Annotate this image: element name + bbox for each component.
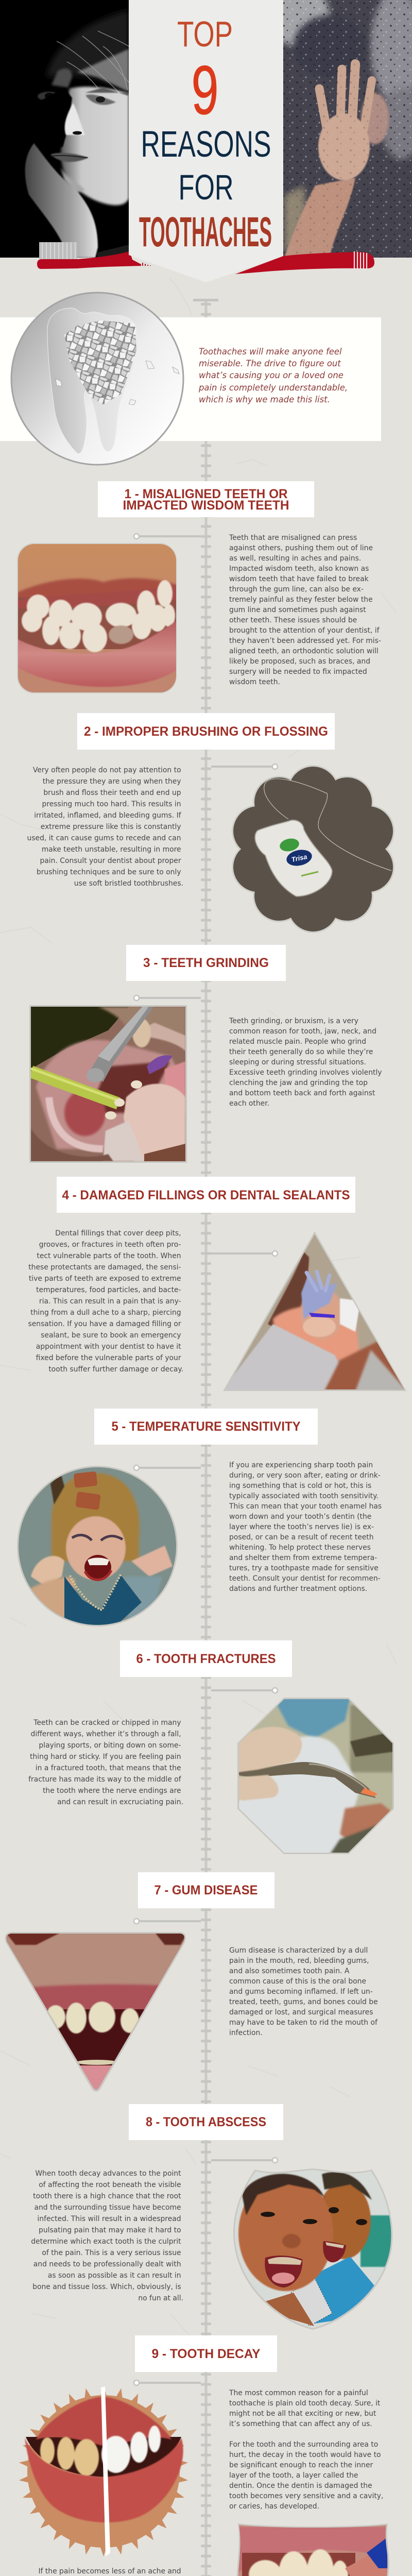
text 9 upper: might not be all that exciting or new, but: [229, 2410, 376, 2418]
text 1: through the gum line, can also be ex-: [229, 585, 364, 594]
text 5: dations and further treatment options.: [229, 1585, 367, 1593]
heading 5: 5 - TEMPERATURE SENSITIVITY: [111, 1419, 301, 1434]
text 9 upper: For the tooth and the surrounding area to: [229, 2441, 378, 2449]
intro panel: [0, 317, 381, 441]
connector 2: [211, 764, 278, 769]
text 2: brushing techniques and be sure to only: [37, 868, 181, 876]
intro paragraph: miserable. The drive to figure out: [199, 359, 341, 368]
text 1: wisdom teeth that have failed to break: [229, 575, 369, 583]
text 9 lower: If the pain becomes less of an ache and: [38, 2567, 181, 2575]
heading 3: [126, 945, 286, 981]
heading 8: [129, 2104, 283, 2140]
text 4: temperatures, food particles, and bacte-: [36, 1286, 181, 1294]
text 3: related muscle pain. People who grind: [229, 1038, 366, 1046]
text 9 upper: it’s something that can affect any of us.: [229, 2420, 372, 2428]
text 1: likely be proposed, such as braces, and: [229, 657, 370, 666]
text 9 upper: toothache is plain old tooth decay. Sure, it: [229, 2399, 381, 2408]
heading 2: 2 - IMPROPER BRUSHING OR FLOSSING: [84, 724, 328, 739]
text 7: pain in the mouth, red, bleeding gums,: [229, 1957, 369, 1965]
text 5: If you are experiencing sharp tooth pain: [229, 1461, 373, 1469]
heading 4: 4 - DAMAGED FILLINGS OR DENTAL SEALANTS: [62, 1188, 350, 1202]
text 3: each other.: [229, 1099, 269, 1108]
text 4: these protectants are damaged, the sensi-: [28, 1263, 181, 1272]
text 5: tures, try a toothpaste made for sensitive: [229, 1564, 379, 1572]
text 2: Very often people do not pay attention to: [33, 766, 181, 774]
photo: brushing teeth: [234, 2522, 391, 2576]
text 4: ria. This can result in a pain that is any-: [39, 1297, 181, 1306]
text 6: different ways, whether it’s through a fall,: [31, 1730, 181, 1738]
heading 9: [135, 2335, 277, 2372]
photo: dental floss in flower frame: [232, 762, 397, 938]
text 8: of the pain. This is a very serious issue: [42, 2249, 181, 2257]
text 3: their teeth generally do so while they’re: [229, 1048, 373, 1056]
text 1: other teeth. These issues should be: [229, 616, 357, 624]
text 7: damaged or lost, and surgical measures: [229, 2008, 373, 2016]
text 1: they haven’t been addressed yet. For mis-: [229, 637, 381, 645]
title: REASONS: REASONS: [141, 124, 271, 165]
text 6: and can result in excruciating pain.: [57, 1798, 183, 1806]
text 1: wisdom teeth.: [229, 678, 280, 686]
text 8: determine which exact tooth is the culprit: [31, 2238, 181, 2246]
text 5: during, or very soon after, eating or drink-: [229, 1471, 381, 1480]
heading 7: [138, 1872, 274, 1908]
text 8: bone and tissue loss. Which, obviously, is: [32, 2283, 181, 2291]
text 9 upper: tooth becomes very sensitive and a cavity,: [229, 2492, 383, 2500]
text 4: sensation. If you have a damaged filling or: [28, 1320, 181, 1328]
text 1: Impacted wisdom teeth, also known as: [229, 565, 369, 573]
text 6: Teeth can be cracked or chipped in many: [33, 1719, 181, 1727]
photo: misaligned teeth: [17, 543, 177, 693]
text 4: tooth suffer further damage or decay.: [48, 1365, 183, 1374]
heading 1: [98, 481, 314, 517]
intro disc: crumbling tooth: [11, 293, 183, 465]
text 9 upper: or caries, has developed.: [229, 2502, 319, 2511]
photo: laughing children in shield: [232, 2166, 397, 2331]
header photo: hand on rainy glass: [283, 0, 412, 258]
photo: whitened smile in starburst: [19, 2386, 188, 2556]
photo: dental drill: [29, 1005, 187, 1163]
intro paragraph: Toothaches will make anyone feel: [199, 347, 342, 357]
text 8: of affecting the root beneath the visible: [39, 2181, 181, 2189]
text 3: Excessive teeth grinding involves violently: [229, 1069, 382, 1077]
heading 2: [77, 713, 335, 750]
text 4: thing from a dull ache to a sharp, piercing: [30, 1309, 181, 1317]
connector 7: [134, 1919, 201, 1924]
text 7: treated, teeth, gums, and bones could be: [229, 1998, 378, 2006]
heading 9: 9 - TOOTH DECAY: [151, 2347, 261, 2361]
text 3: sleeping or during stressful situations.: [229, 1058, 366, 1066]
text 9 upper: layer of the tooth, a layer called the: [229, 2471, 358, 2480]
photo: screaming woman in circle: [15, 1463, 180, 1628]
text 2: make teeth unstable, resulting in more: [42, 845, 181, 854]
text 3: common reason for tooth, jaw, neck, and: [229, 1027, 376, 1036]
title: FOR: FOR: [178, 167, 234, 207]
photo: dental floss in flower frame: Trisa: [290, 853, 308, 863]
text 7: and gums becoming inflamed. If left un-: [229, 1988, 373, 1996]
text 1: against others, pushing them out of line: [229, 544, 373, 552]
text 5: layer where the tooth’s nerves lie) is ex-: [229, 1523, 374, 1531]
text 1: as well, resulting in aches and pains.: [229, 554, 361, 563]
text 4: sealant, be sure to book an emergency: [41, 1331, 181, 1340]
intro paragraph: what’s causing you or a loved one: [199, 370, 344, 380]
text 3: clenching the jaw and grinding the top: [229, 1079, 368, 1087]
connector 8: [211, 2158, 278, 2163]
text 2: brush and floss their teeth and end up: [43, 789, 181, 797]
text 5: and shelter them from extreme tempera-: [229, 1554, 377, 1562]
heading 5: [94, 1409, 318, 1445]
text 8: When tooth decay advances to the point: [35, 2170, 181, 2178]
text 4: tect vulnerable parts of the tooth. When: [37, 1252, 181, 1260]
intro paragraph: pain is completely understandable,: [198, 383, 348, 393]
connector 9: [134, 2380, 201, 2385]
title: TOP: TOP: [177, 14, 233, 54]
photo: extracted tooth in forceps, octagon: [237, 1698, 397, 1855]
text 8: and the surrounding tissue have become: [34, 2204, 181, 2212]
heading 1: IMPACTED WISDOM TEETH: [123, 498, 289, 513]
connector 3: [134, 995, 201, 1001]
heading 3: 3 - TEETH GRINDING: [143, 956, 269, 970]
text 2: the pressure they are using when they: [43, 777, 181, 786]
text 5: ing something that is cold or hot, this is: [229, 1482, 371, 1490]
heading 7: 7 - GUM DISEASE: [154, 1883, 258, 1897]
text 4: Dental fillings that cover deep pits,: [55, 1229, 181, 1238]
text 5: worn down and your tooth’s dentin (the: [229, 1513, 371, 1521]
text 1: gum line and sometimes push against: [229, 606, 366, 614]
text 1: brought to the attention of your dentist, if: [229, 626, 380, 635]
heading 1: 1 - MISALIGNED TEETH OR: [125, 487, 287, 501]
heading 4: [57, 1177, 355, 1213]
text 8: as soon as possible as it can result in: [48, 2272, 181, 2280]
central spine: [193, 299, 218, 2576]
text 9 upper: dentin. Once the dentin is damaged the: [229, 2482, 372, 2490]
text 7: Gum disease is characterized by a dull: [229, 1946, 368, 1955]
text 7: infection.: [229, 2029, 263, 2037]
text 2: extreme pressure like this is constantly: [41, 823, 181, 831]
text 4: tive parts of teeth are exposed to extreme: [29, 1275, 181, 1283]
text 6: the tooth where the nerve endings are: [43, 1787, 181, 1795]
text 6: playing sports, or biting down on some-: [39, 1741, 181, 1750]
text 6: in a fractured tooth, that means that the: [36, 1764, 181, 1772]
text 4: grooves, or fractures in teeth often pro-: [39, 1241, 181, 1249]
text 6: fracture has made its way to the middle of: [28, 1775, 182, 1784]
text 9 upper: The most common reason for a painful: [229, 2389, 368, 2397]
text 8: and needs to be professionally dealt with: [33, 2260, 181, 2268]
text 7: may have to be taken to rid the mouth of: [229, 2019, 378, 2027]
text 7: and also sometimes tooth pain. A: [229, 1967, 350, 1975]
text 9 upper: be significant enough to reach the inner: [229, 2461, 373, 2469]
text 1: aligned teeth, an orthodontic solution will: [229, 647, 379, 655]
text 4: appointment with your dentist to have it: [36, 1343, 181, 1351]
photo: dental curing light in triangle: [221, 1231, 407, 1394]
connector 6: [211, 1688, 278, 1693]
connector 4: [206, 1251, 278, 1256]
header photo: man with toothache: [0, 0, 129, 258]
heading 8: 8 - TOOTH ABSCESS: [146, 2115, 266, 2129]
intro paragraph: which is why we made this list.: [199, 395, 330, 404]
connector 1: [134, 534, 201, 539]
toothbrush right: [235, 251, 374, 274]
text 8: tooth there is a high chance that the root: [33, 2192, 181, 2200]
text 1: surgery will be needed to fix impacted: [229, 668, 367, 676]
toothbrush left: [37, 242, 150, 269]
text 2: used, it can cause gums to recede and can: [27, 834, 181, 842]
text 1: tremely painful as they fester below the: [229, 596, 373, 604]
connector 5: [134, 1465, 201, 1470]
text 5: typically associated with tooth sensitivity.: [229, 1492, 379, 1500]
text 4: fixed before the vulnerable parts of your: [36, 1354, 181, 1362]
text 8: no fun at all.: [138, 2294, 183, 2302]
text 5: This can mean that your tooth enamel has: [229, 1502, 382, 1511]
heading 6: [120, 1640, 292, 1677]
text 8: pulsating pain that may make it hard to: [39, 2226, 181, 2234]
heading 6: 6 - TOOTH FRACTURES: [136, 1652, 276, 1666]
text 3: and bottom teeth back and forth against: [229, 1089, 375, 1097]
text 8: infected. This will result in a widespread: [37, 2215, 181, 2223]
text 1: Teeth that are misaligned can press: [229, 534, 357, 542]
title banner: [129, 0, 283, 282]
photo: gums in inverted triangle: [0, 1932, 191, 2094]
title: 9: 9: [192, 52, 218, 129]
text 2: pain. Consult your dentist about proper: [40, 857, 181, 865]
text 7: common cause of this is the oral bone: [229, 1977, 366, 1986]
text 5: teeth. Consult your dentist for recommen-: [229, 1574, 381, 1583]
text 5: whitening. To help protect these nerves: [229, 1544, 371, 1552]
text 3: Teeth grinding, or bruxism, is a very: [229, 1017, 358, 1025]
text 9 upper: hurt, the decay in the tooth would have to: [229, 2451, 381, 2459]
text 2: irritated, inflamed, and bleeding gums. If: [34, 811, 182, 820]
text 2: use soft bristled toothbrushes.: [74, 879, 183, 888]
text 2: pressing much too hard. This results in: [42, 800, 181, 808]
text 5: posed, or can be a result of recent teeth: [229, 1533, 374, 1541]
text 6: thing hard or sticky. If you are feeling pain: [30, 1753, 181, 1761]
